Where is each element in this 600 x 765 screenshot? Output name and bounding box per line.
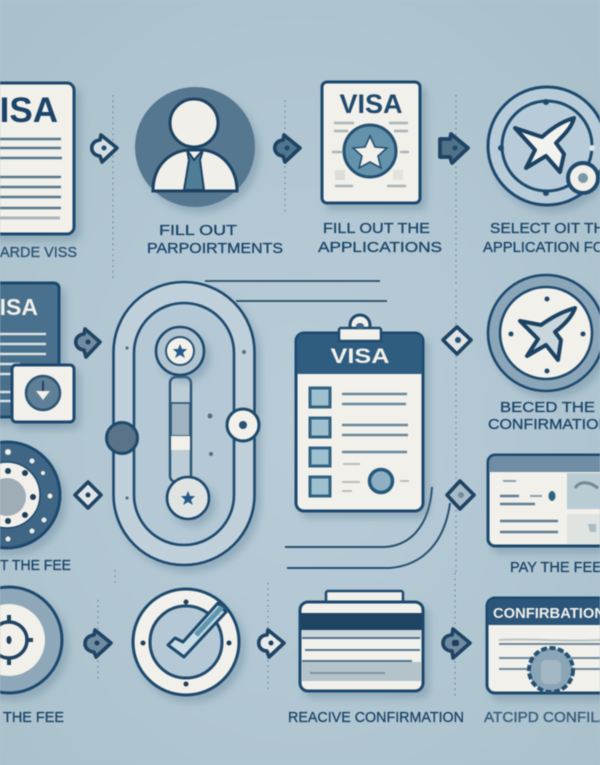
track dots <box>125 346 246 500</box>
left knob <box>106 422 138 454</box>
label: fill out appointments <box>147 222 283 257</box>
label: fill out appointments: PARPOIRTMENTS <box>147 240 283 257</box>
visa checklist clipboard: VISA <box>330 345 390 368</box>
arrow 7 <box>447 481 474 509</box>
seal <box>529 648 573 692</box>
arrow 5 <box>443 327 471 354</box>
arrow 2 <box>275 135 300 162</box>
step: visa document <box>0 83 77 261</box>
arrow 10 <box>443 629 470 658</box>
step: visa with star <box>318 82 442 256</box>
visa checklist clipboard <box>296 315 423 511</box>
step: plane compass <box>488 275 600 433</box>
connecting bar <box>170 377 191 482</box>
central track diagram <box>106 282 259 565</box>
label: fill out the applications: APPLICATIONS <box>318 239 442 256</box>
step: person icon <box>135 87 283 257</box>
arrow 9 <box>259 630 284 657</box>
clip <box>339 315 381 341</box>
label: fill out the applications <box>318 220 442 256</box>
bottom star pin <box>167 477 209 519</box>
top star pin <box>156 327 204 375</box>
checkboxes <box>310 388 330 496</box>
label: fill out the applications: FILL OUT THE <box>323 220 430 237</box>
label: the fee: THE FEE <box>3 709 64 726</box>
step: confirmation certificate <box>487 598 600 693</box>
label: fill out appointments: FILL OUT <box>159 222 237 239</box>
label: pay the fee left: T THE FEE <box>0 557 71 574</box>
connector lines top <box>205 281 387 301</box>
label: visa document: ARDE VISS <box>0 244 77 261</box>
step: receive confirmation card <box>288 591 464 726</box>
dotted dividers <box>98 95 456 697</box>
step: gear circle <box>0 587 62 693</box>
step: payment window <box>488 455 600 546</box>
connector lines bottom <box>285 487 450 568</box>
step: visa with star: VISA <box>339 89 403 119</box>
step: plane badge <box>483 87 600 256</box>
label: select the application form <box>483 220 600 256</box>
arrow 4 <box>76 329 100 357</box>
label: receive confirmation: REACIVE CONFIRMATION <box>288 709 464 726</box>
arrow 8 <box>85 630 111 657</box>
arrow 1 <box>92 135 117 162</box>
label: confirmation: CONFIRMATION <box>488 416 600 433</box>
step: checkmark badge <box>133 589 239 695</box>
step: dark visa card <box>0 283 74 422</box>
label: confirmation <box>488 399 600 433</box>
step: confirmation certificate: CONFIRBATION <box>493 606 600 622</box>
arrow 6 <box>75 482 101 508</box>
label: confirmation: BECED THE <box>500 399 595 416</box>
right knob <box>227 409 259 441</box>
step: dial <box>0 442 60 548</box>
arrow 3 <box>440 134 468 163</box>
